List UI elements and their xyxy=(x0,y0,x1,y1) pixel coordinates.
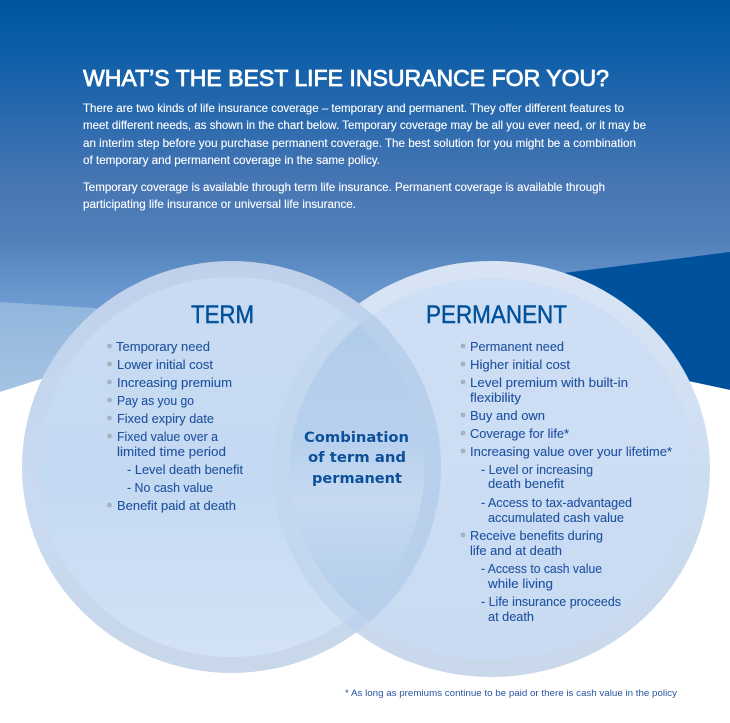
permanent list: Buy and own xyxy=(470,408,545,423)
intro paragraph: two kinds of coverage: There are two kinds of life insurance coverage – temporary and permanent. They offer different features to xyxy=(83,101,624,115)
permanent list: Receive benefits during xyxy=(470,528,603,543)
overlap lens xyxy=(290,480,424,526)
permanent list: - Life insurance proceeds xyxy=(481,594,621,609)
permanent list: - Access to cash value xyxy=(481,561,602,576)
term list: Lower initial cost xyxy=(117,357,213,372)
permanent list: Permanent need xyxy=(470,339,564,354)
intro paragraph: two kinds of coverage: an interim step before you purchase permanent coverage. The best solution for you might be a combination xyxy=(83,136,636,150)
intro paragraph: where coverage is available: Temporary coverage is available through term life insurance. Permanent coverage is available through xyxy=(83,180,605,194)
heading: permanent: PERMANENT xyxy=(426,301,567,329)
term list: Pay as you go xyxy=(117,393,194,408)
intro paragraph: where coverage is available xyxy=(83,180,605,211)
permanent list: - Level or increasing xyxy=(481,462,593,477)
term list xyxy=(107,339,243,513)
background: white lower area xyxy=(0,390,730,723)
right circle: permanent xyxy=(273,261,710,677)
permanent list: Increasing value over your lifetime* xyxy=(470,444,672,459)
permanent list: - Access to tax-advantaged xyxy=(481,495,632,510)
permanent list: Coverage for life* xyxy=(470,426,569,441)
permanent list: life and at death xyxy=(470,543,562,558)
combination label: of term and xyxy=(308,450,406,466)
permanent list: Higher initial cost xyxy=(470,357,570,372)
background: dark blue wave at right xyxy=(540,252,730,390)
intro paragraph: two kinds of coverage xyxy=(83,101,646,167)
heading: term: TERM xyxy=(191,301,254,329)
term list: - Level death benefit xyxy=(127,462,243,477)
footnote: * As long as premiums continue to be paid or there is cash value in the policy xyxy=(345,688,677,699)
permanent list: at death xyxy=(488,609,534,624)
background: light blue wave at left xyxy=(0,302,110,392)
permanent list: death benefit xyxy=(488,476,564,491)
term list: Temporary need xyxy=(116,339,210,354)
intro paragraph: two kinds of coverage: of temporary and permanent coverage in the same policy. xyxy=(83,153,380,167)
permanent list xyxy=(461,339,672,624)
combination label: permanent xyxy=(312,471,402,487)
term list: Increasing premium xyxy=(117,375,232,390)
permanent list: while living xyxy=(487,576,553,591)
term list: limited time period xyxy=(117,444,226,459)
intro paragraph: where coverage is available: participating life insurance or universal life insurance. xyxy=(83,197,356,211)
background: blue sky gradient xyxy=(0,0,730,320)
combination label xyxy=(304,430,409,487)
term list: Benefit paid at death xyxy=(117,498,236,513)
permanent list: flexibility xyxy=(470,390,522,405)
term list: - No cash value xyxy=(127,480,213,495)
term list: Fixed expiry date xyxy=(117,411,214,426)
combination label: Combination xyxy=(304,430,409,446)
left circle: term xyxy=(22,261,441,673)
intro paragraph: two kinds of coverage: meet different needs, as shown in the chart below. Temporary coverage may be all you ever need, or it may be xyxy=(83,118,646,132)
venn diagram circles xyxy=(22,261,710,677)
term list: Fixed value over a xyxy=(117,429,219,444)
title: WHAT’S THE BEST LIFE INSURANCE FOR YOU? xyxy=(83,65,609,91)
overlap ring xyxy=(344,304,441,632)
permanent list: Level premium with built-in xyxy=(470,375,628,390)
background: white swoop under the circles xyxy=(0,340,730,420)
permanent list: accumulated cash value xyxy=(488,510,624,525)
